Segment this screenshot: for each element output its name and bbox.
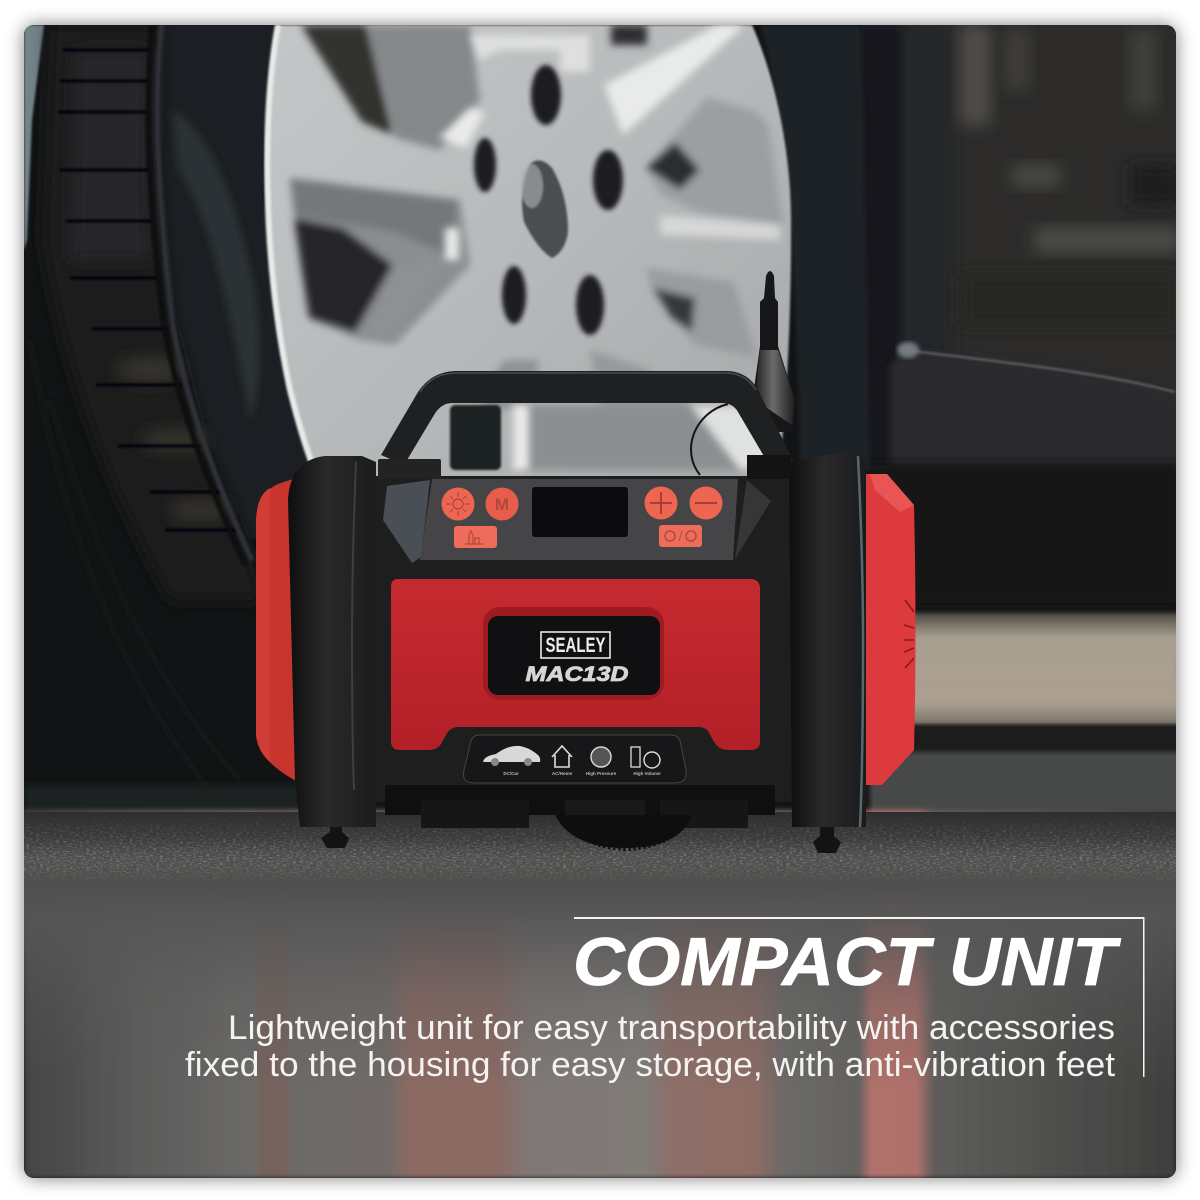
wheel hub badge — [521, 160, 568, 258]
wheel openings — [290, 25, 783, 470]
background: alloy wheel — [267, 25, 791, 530]
gear — [555, 815, 692, 848]
left bumper — [288, 456, 376, 827]
display screen — [532, 487, 628, 537]
wire — [691, 404, 728, 475]
left red end — [256, 478, 296, 781]
button: plus — [644, 486, 678, 520]
wheel highlights — [439, 25, 780, 470]
icon: tyre — [591, 747, 611, 767]
icon plate — [463, 735, 686, 783]
button: brightness — [442, 488, 474, 520]
badge — [483, 607, 664, 700]
background: tyre — [24, 25, 870, 820]
right red end — [862, 474, 916, 785]
control panel — [383, 479, 771, 563]
lug nut holes — [474, 65, 623, 335]
body text: Lightweight unit for easy transportability with accessories — [228, 1009, 1115, 1047]
tread block — [42, 25, 262, 600]
heading: COMPACT UNIT — [573, 924, 1122, 1000]
feet — [321, 827, 349, 848]
compressor product — [256, 271, 916, 853]
icon: home — [552, 746, 572, 767]
icon: volume — [631, 747, 640, 767]
background: car body right — [862, 25, 1176, 812]
body text — [185, 1009, 1116, 1084]
red front panel — [391, 579, 760, 750]
underside — [385, 785, 775, 815]
tread grooves — [58, 50, 240, 530]
icon labels — [503, 771, 661, 776]
callout: frame — [574, 917, 1144, 1077]
button: power — [659, 525, 702, 547]
icon labels: High Volume — [633, 771, 661, 776]
icon labels: DC/Car — [503, 771, 519, 776]
right bumper — [789, 451, 866, 827]
model: MAC13D: MAC13D — [526, 663, 628, 686]
main body — [362, 476, 792, 802]
button: M — [486, 488, 518, 520]
button: mode — [454, 526, 497, 548]
button: minus — [690, 486, 722, 520]
body text: fixed to the housing for easy storage, with anti-vibration feet — [185, 1046, 1116, 1084]
logo: SEALEY — [541, 632, 610, 658]
inflator nozzle — [753, 271, 795, 432]
icon labels: High Pressure — [586, 771, 617, 776]
floor — [24, 810, 1176, 1178]
air hose stub — [450, 405, 501, 470]
icon: car — [483, 746, 540, 762]
button: M: M — [495, 495, 509, 514]
carry handle — [381, 371, 798, 470]
top stubs — [378, 459, 441, 476]
tyre shoulder — [24, 25, 44, 250]
icon labels: AC/Home — [552, 771, 573, 776]
logo: SEALEY: SEALEY — [546, 634, 606, 657]
